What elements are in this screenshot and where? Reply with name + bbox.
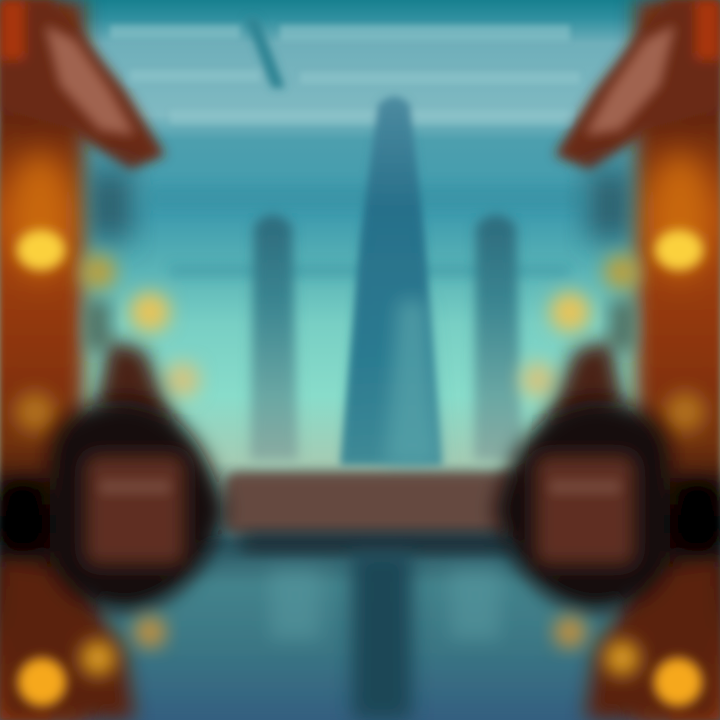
reflection streaks bbox=[270, 570, 500, 640]
right tower bbox=[474, 215, 522, 460]
sky streaks bbox=[110, 25, 580, 124]
water reflection bbox=[100, 540, 620, 720]
platform dark base bbox=[240, 532, 510, 552]
left building bbox=[0, 0, 225, 720]
left tower bbox=[250, 215, 298, 460]
centre tower bbox=[340, 96, 442, 465]
sky bands bbox=[150, 185, 580, 277]
centre tower light side bbox=[385, 300, 440, 465]
tower reflection bbox=[352, 552, 412, 720]
right building bbox=[495, 0, 720, 720]
dark diagonal sky stroke bbox=[245, 18, 285, 88]
platform bbox=[225, 472, 525, 534]
